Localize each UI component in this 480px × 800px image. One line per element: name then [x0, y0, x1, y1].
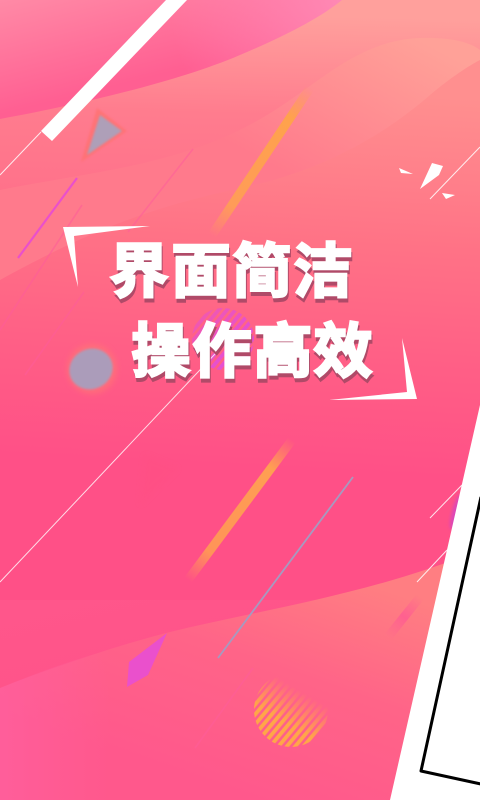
right thin lines [417, 485, 462, 582]
blue-gray line [218, 477, 353, 658]
magenta line [18, 178, 77, 258]
heading line 1 shadow and text: 面 [172, 243, 232, 309]
white shards [399, 163, 455, 199]
wave layers: top [0, 0, 480, 600]
striped circle: magenta [192, 308, 254, 370]
striped circle: orange [254, 680, 328, 747]
orange bar: lower [188, 440, 292, 580]
white diagonal bar [41, 0, 187, 141]
magenta diamond [127, 633, 167, 687]
long thin diagonal line [0, 337, 231, 582]
orange bar: upper [212, 88, 310, 235]
icon: blurred circle [63, 342, 119, 396]
heading line 1 shadow and text: 界 [110, 243, 170, 309]
heading line 1 shadow and text: 界 [109, 239, 169, 305]
heading line 1 shadow and text: 洁 [294, 243, 354, 309]
heading line 1 shadow and text: 简 [232, 239, 292, 305]
heading line 1 shadow and text: 简 [233, 243, 293, 309]
corner bracket: bottom right [329, 338, 417, 400]
heading line 2 shadow and text: 高 [253, 319, 313, 385]
wave layer: bottom [0, 550, 480, 800]
thin line by shards [430, 147, 480, 199]
heading line 1 shadow and text: 洁 [293, 239, 353, 305]
faint decorative lines [0, 149, 253, 748]
heading line 2 shadow and text: 高 [254, 323, 314, 389]
heading line 1 shadow and text: 面 [171, 239, 231, 305]
heading line 2 shadow and text: 效 [314, 323, 374, 389]
heading line 2 shadow and text: 操 [131, 319, 191, 385]
heading line 2 shadow and text: 操 [132, 323, 192, 389]
faint pink bar [388, 597, 420, 637]
thin white line from bar [0, 132, 41, 175]
icon: blurred triangle [81, 108, 127, 162]
purple glow by device [447, 494, 465, 530]
heading line 2 shadow and text: 作 [193, 323, 253, 389]
faint triangle [140, 455, 178, 505]
heading line 2 shadow and text: 效 [313, 319, 373, 385]
device: black screen outline [421, 497, 480, 784]
corner bracket: top left [63, 226, 150, 287]
heading line 2 shadow and text: 作 [192, 319, 252, 385]
device: white phone body [390, 405, 480, 800]
heading line 1 shadow and text [109, 239, 354, 309]
heading line 2 shadow and text [131, 319, 374, 389]
